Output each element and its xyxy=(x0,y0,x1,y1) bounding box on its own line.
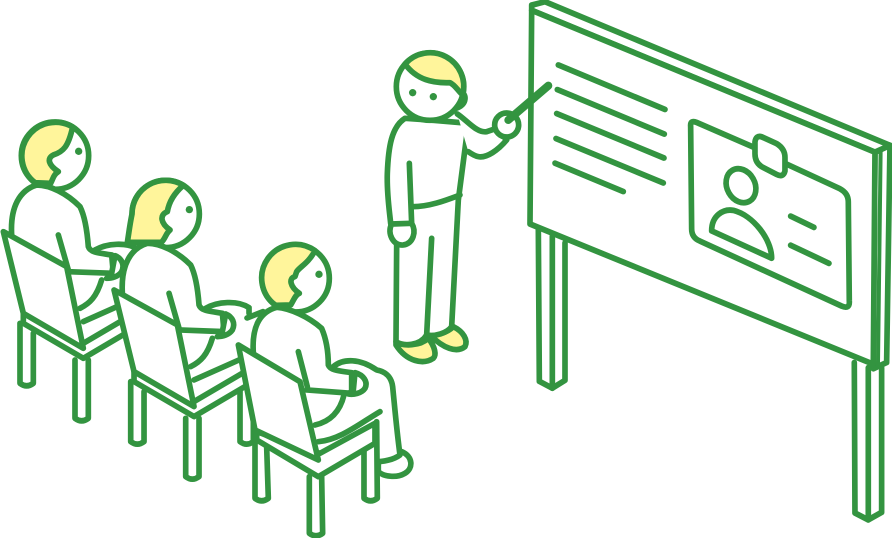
seated person three xyxy=(238,244,411,536)
chair one back and seat xyxy=(3,232,143,358)
leg and shoe three xyxy=(307,361,411,476)
card text lines xyxy=(791,216,829,263)
pointer stick xyxy=(508,86,548,120)
presenter raised arm xyxy=(457,114,507,157)
presenter body details xyxy=(409,163,460,335)
details two xyxy=(191,338,239,380)
chair three legs xyxy=(255,422,377,536)
text lines on board xyxy=(555,65,665,192)
profile card xyxy=(691,122,849,307)
presenter body xyxy=(387,118,468,345)
card clip xyxy=(755,136,785,176)
hand one xyxy=(107,256,123,278)
seated person two xyxy=(114,180,263,479)
presenter hand xyxy=(495,113,519,137)
body three xyxy=(253,307,352,393)
head three xyxy=(262,244,329,312)
hand two xyxy=(217,314,234,337)
details three xyxy=(315,395,380,442)
body two xyxy=(122,243,224,332)
seated person one xyxy=(3,122,143,421)
hand three xyxy=(348,373,366,394)
head two xyxy=(127,180,199,248)
lap one xyxy=(68,244,138,350)
card avatar xyxy=(712,163,772,258)
body one xyxy=(11,185,113,273)
board frame xyxy=(530,2,890,369)
board left leg xyxy=(538,229,565,388)
chair two back and seat xyxy=(114,290,253,417)
chair three back and seat xyxy=(238,345,375,477)
presenter fist xyxy=(390,223,414,245)
head one xyxy=(21,122,89,189)
presenter shoes xyxy=(396,327,466,362)
board right leg xyxy=(854,363,882,520)
lap two xyxy=(179,302,263,408)
details one xyxy=(80,280,128,322)
whiteboard on legs xyxy=(530,2,890,520)
chair one legs xyxy=(20,323,88,421)
presenter xyxy=(387,53,548,362)
presenter head xyxy=(396,53,465,120)
chair two legs xyxy=(131,382,253,479)
